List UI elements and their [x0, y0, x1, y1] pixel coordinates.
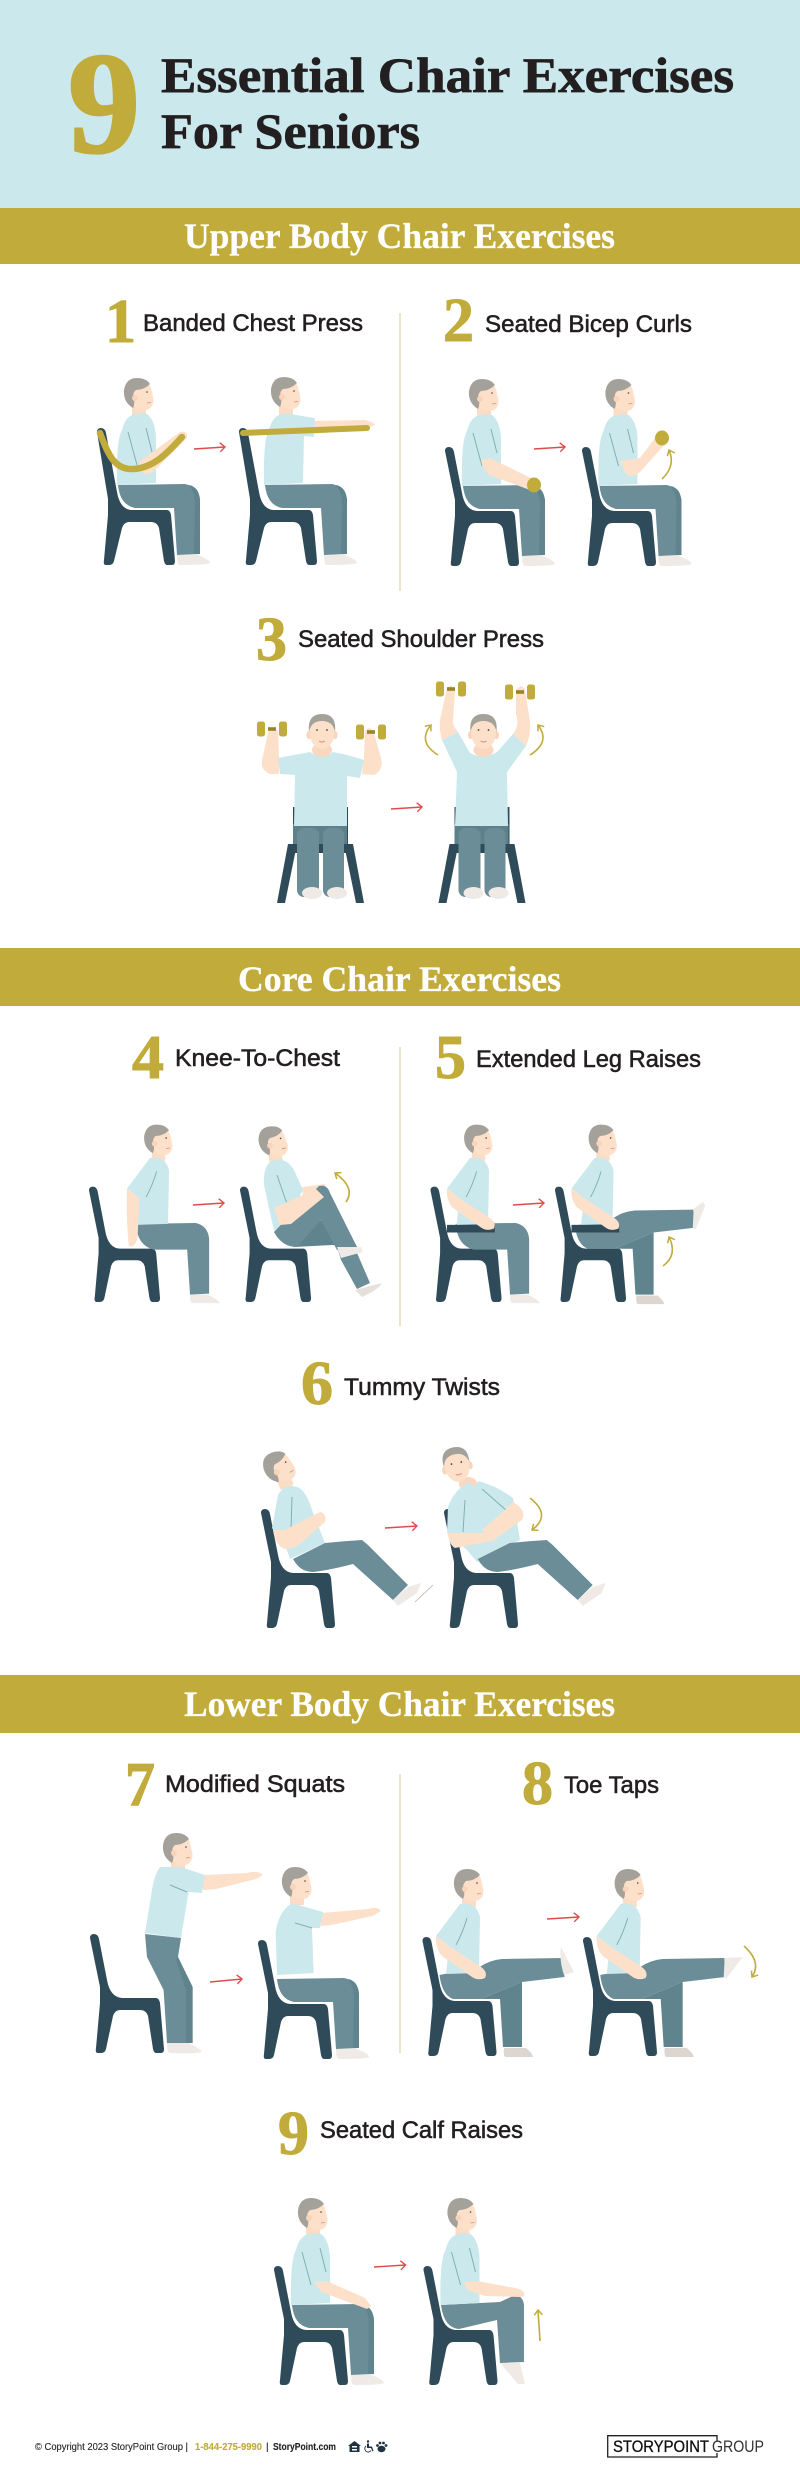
figure: twisting: [438, 1444, 606, 1628]
arrow: [547, 1917, 579, 1919]
exercise 9 illustration: [274, 2198, 540, 2385]
figure: seated upright: [89, 1125, 220, 1303]
exercise 3 heading: [256, 606, 544, 674]
arrow: [193, 1203, 224, 1205]
logo: [608, 2436, 764, 2457]
exercise 1 heading: 1: [105, 288, 136, 356]
header panel: [0, 0, 800, 208]
exercise 2 heading: Seated Bicep Curls: [485, 311, 692, 338]
figure: dumbbells raised: [425, 682, 543, 903]
exercise 5 heading: [435, 1024, 701, 1092]
figure: heels raised: [424, 2198, 540, 2385]
exercise 4 heading: Knee-To-Chest: [175, 1045, 340, 1072]
motion arrows: [425, 725, 438, 755]
exercise 9 heading: Seated Calf Raises: [320, 2117, 523, 2144]
exercise 7 heading: 7: [125, 1751, 155, 1819]
logo: STORYPOINT: [613, 2438, 709, 2456]
exercise 5 illustration: [430, 1125, 705, 1304]
motion arrow: [530, 1498, 542, 1530]
arrow: [210, 1979, 242, 1982]
figure: squat seated: [258, 1867, 381, 2059]
icons: housing, accessibility, pet: [348, 2440, 387, 2452]
arrow: [385, 1526, 417, 1528]
motion arrow: [662, 450, 671, 479]
exercise 8 heading: 8: [522, 1750, 553, 1818]
motion arrow: [335, 1173, 349, 1202]
exercise 1 heading: [105, 288, 363, 356]
exercise 8 heading: Toe Taps: [564, 1772, 659, 1799]
exercise 7 heading: [125, 1751, 345, 1819]
title: For Seniors: [161, 103, 420, 159]
arrow: [513, 1203, 544, 1205]
exercise 6 heading: Tummy Twists: [344, 1374, 500, 1401]
figure: leg raised, toes down: [583, 1869, 756, 2057]
exercise 7 heading: Modified Squats: [165, 1771, 345, 1798]
figure: curl: [582, 379, 692, 566]
exercise 8 heading: [522, 1750, 659, 1818]
section band: core: [0, 948, 800, 1006]
exercise 9 heading: 9: [278, 2100, 309, 2168]
figure: leg raised: [555, 1125, 705, 1304]
section band: upper body: Upper Body Chair Exercises: [184, 216, 615, 256]
section band: lower body: [0, 1675, 800, 1733]
exercise 3 heading: 3: [256, 606, 287, 674]
figure: band extended: [239, 377, 375, 565]
arrow: [534, 447, 565, 449]
figure: band at chest: [97, 378, 210, 565]
exercise 5 heading: 5: [435, 1024, 466, 1092]
figure: knee lifted: [240, 1124, 382, 1302]
title: Essential Chair Exercises: [161, 47, 734, 103]
exercise 8 illustration: [422, 1869, 756, 2057]
exercise 3 illustration: [257, 682, 543, 903]
copyright line: 1-844-275-9990: [195, 2442, 262, 2453]
exercise 7 illustration: [90, 1833, 381, 2059]
footer: [35, 2436, 764, 2457]
exercise 2 illustration: [445, 379, 692, 566]
exercise 6 heading: [301, 1350, 500, 1418]
section band: core: Core Chair Exercises: [238, 959, 561, 999]
figure: leg raised, toes up: [422, 1869, 574, 2057]
motion arrow: [663, 1237, 672, 1266]
exercise 4 heading: [132, 1024, 340, 1092]
arrow: [194, 447, 225, 449]
exercise 1 illustration: [97, 377, 375, 565]
motion arrow: [538, 2310, 540, 2341]
figure: leaning back: [259, 1447, 433, 1628]
figure: seated hands on seat: [430, 1125, 540, 1303]
exercise 2 heading: 2: [443, 287, 474, 355]
section band: upper body: [0, 208, 800, 264]
figure: feet flat: [274, 2198, 384, 2385]
arrow: [374, 2265, 406, 2267]
motion arrow: [744, 1946, 756, 1977]
exercise 2 heading: [443, 287, 692, 355]
figure: arm down: [445, 379, 555, 566]
exercise 6 heading: 6: [301, 1350, 333, 1418]
exercise 9 heading: [278, 2100, 523, 2168]
exercise 4 heading: 4: [132, 1024, 164, 1092]
exercise 6 illustration: [259, 1444, 606, 1628]
figure: standing: [90, 1833, 263, 2053]
copyright line: © Copyright 2023 StoryPoint Group |: [35, 2442, 188, 2453]
exercise 1 heading: Banded Chest Press: [143, 310, 363, 337]
exercise 3 heading: Seated Shoulder Press: [298, 626, 544, 653]
exercise 5 heading: Extended Leg Raises: [476, 1046, 701, 1073]
big number 9: 9: [68, 24, 140, 184]
exercise 4 illustration: [89, 1124, 382, 1303]
logo: GROUP: [712, 2438, 764, 2456]
section band: lower body: Lower Body Chair Exercises: [184, 1684, 615, 1724]
copyright line: StoryPoint.com: [273, 2442, 336, 2453]
arrow: [391, 807, 422, 809]
figure: dumbbells at shoulder: [257, 714, 386, 903]
copyright line: |: [266, 2442, 269, 2453]
